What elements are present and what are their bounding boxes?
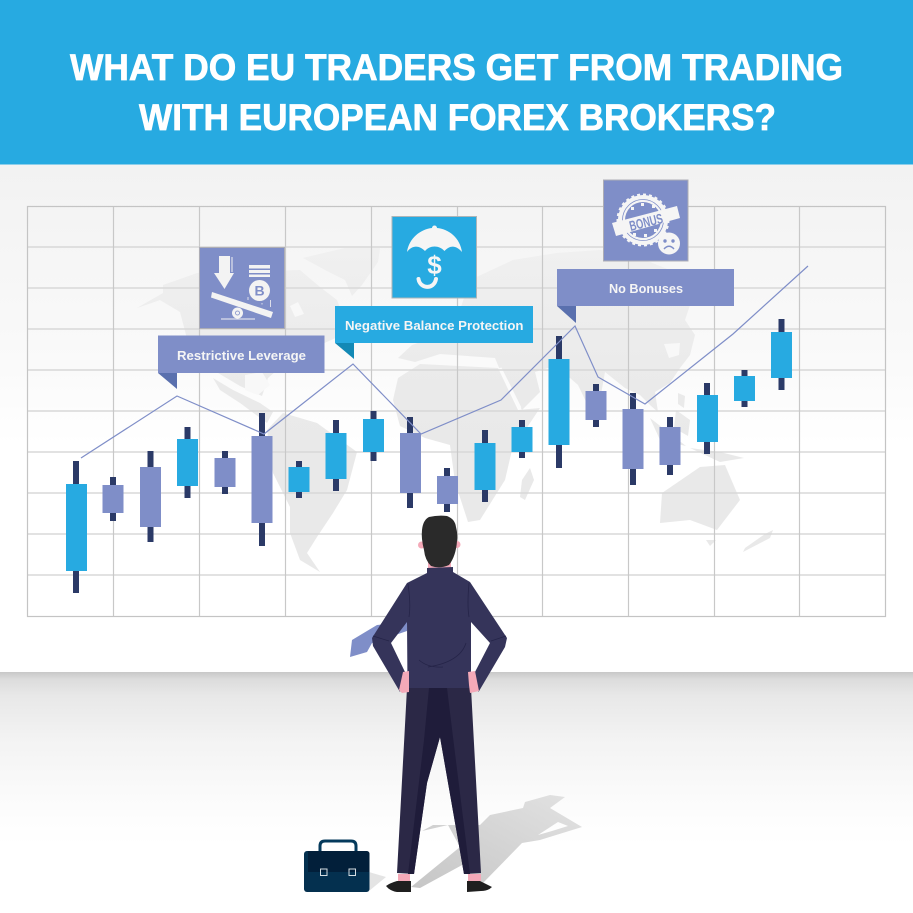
wall background [0, 164, 913, 673]
map: New Zealand [743, 530, 773, 552]
person shadow on floor [411, 795, 582, 888]
callout: restrictive leverage: Restrictive Leverage [177, 348, 306, 363]
map: Indonesia and Philippines [650, 393, 744, 462]
hair [422, 516, 457, 567]
trousers [397, 688, 481, 874]
map: Madagascar [520, 468, 534, 500]
map: Red Sea gap [500, 368, 520, 408]
map: Greenland [303, 248, 380, 296]
socks [398, 874, 481, 881]
shoes [386, 881, 492, 892]
blue candle bodies [66, 332, 792, 571]
icon: umbrella with dollar [392, 216, 476, 298]
bitcoin coin: B [254, 282, 265, 298]
callout: no bonuses [557, 269, 734, 323]
dollar sign: $ [427, 250, 442, 280]
tilted plank [211, 292, 273, 318]
trouser shading [408, 688, 470, 874]
map: Australia [660, 465, 740, 546]
case shadow [369, 872, 386, 891]
icon: no bonus [604, 180, 688, 261]
umbrella hook [418, 279, 436, 287]
floor [0, 672, 913, 913]
map: Eurasia [398, 250, 730, 412]
briefcase [304, 841, 386, 892]
jacket creases [373, 583, 506, 667]
clasps [320, 869, 356, 876]
hands [399, 671, 479, 693]
icon: restrictive leverage [200, 248, 284, 328]
stamp seal [618, 194, 668, 246]
fulcrum [221, 308, 255, 320]
candle wicks [73, 319, 784, 593]
ears [418, 541, 460, 548]
sad face [658, 232, 680, 254]
purple candle bodies [102, 391, 680, 527]
stacked bars [249, 265, 270, 277]
case body [304, 851, 370, 892]
map: South America [267, 413, 357, 572]
callout: restrictive leverage [158, 336, 324, 389]
trend line [81, 266, 808, 458]
callout: no bonuses: No Bonuses [609, 281, 683, 296]
businessman [350, 516, 507, 892]
callout: negative balance protection: Negative Balance Protection [345, 318, 524, 333]
umbrella canopy [407, 226, 462, 252]
chart grid [27, 206, 886, 616]
world map [137, 248, 773, 572]
title: WHAT DO EU TRADERS GET FROM TRADING [70, 47, 843, 88]
map: Central America [213, 378, 273, 423]
bonus word: BONUS [628, 210, 664, 234]
neck [428, 558, 451, 570]
callout: negative balance protection [335, 306, 533, 359]
jacket [372, 567, 507, 692]
ribbon [612, 206, 680, 236]
map: North America [137, 270, 345, 396]
down arrow [214, 256, 234, 289]
candlestick chart [66, 319, 792, 593]
map: Africa [393, 364, 540, 522]
map: inland seas [245, 302, 680, 395]
header banner [0, 0, 913, 164]
handle [320, 841, 356, 851]
tie blown behind [350, 622, 407, 657]
title: WITH EUROPEAN FOREX BROKERS? [139, 97, 776, 138]
